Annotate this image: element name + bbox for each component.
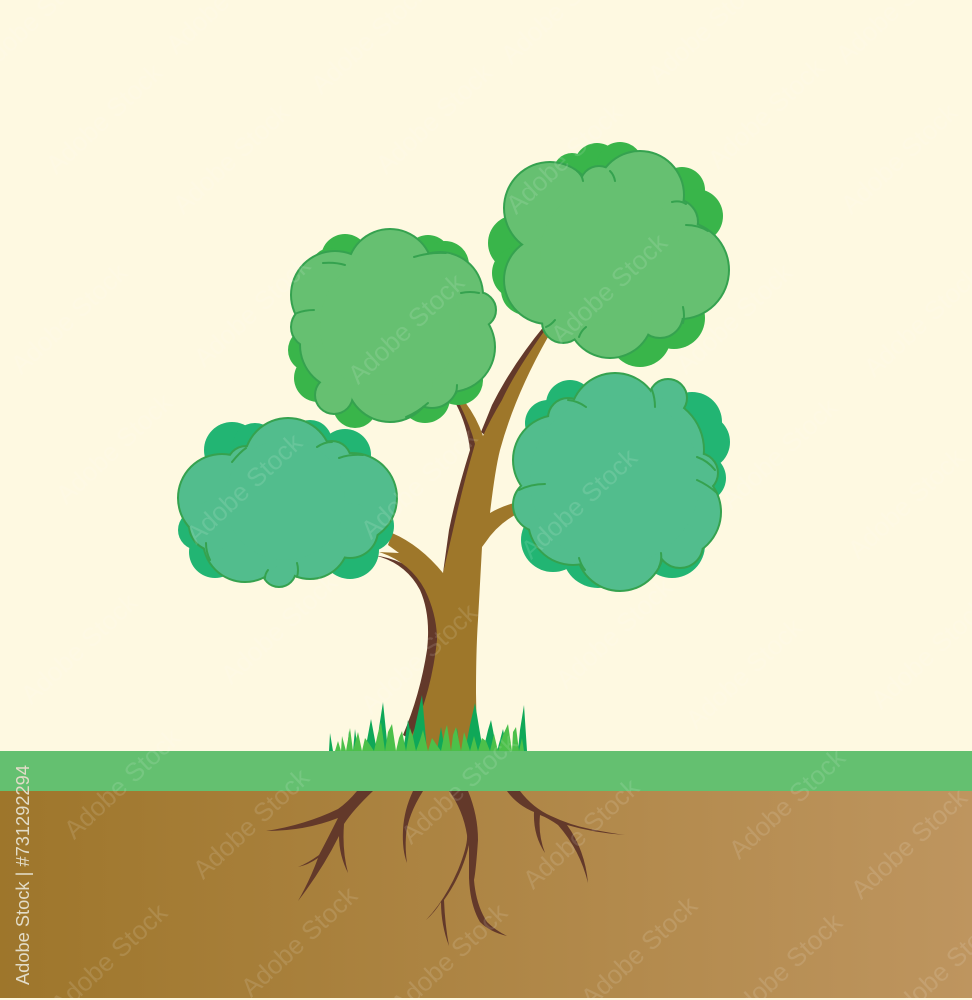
- foliage outline bottom left: [179, 419, 396, 586]
- stock watermarks: Adobe Stock: [715, 391, 844, 515]
- foliage back bottom left: [178, 420, 394, 579]
- foliage creases bottom right: [519, 390, 717, 570]
- stock watermarks: Adobe Stock: [188, 249, 317, 373]
- stock watermarks: Adobe Stock: [215, 566, 344, 690]
- soil band: [0, 791, 972, 998]
- grass dark blades: [329, 695, 527, 751]
- stock watermarks: Adobe Stock: [702, 51, 831, 175]
- crown top right: [488, 142, 728, 367]
- stock watermarks: Adobe Stock: [167, 96, 296, 220]
- root centre: [426, 791, 507, 946]
- foliage front top left: [292, 230, 495, 421]
- crown bottom left: [178, 419, 396, 586]
- stock watermarks: Adobe Stock: [680, 611, 809, 735]
- stock watermarks: Adobe Stock: [5, 256, 134, 380]
- stock watermarks: Adobe Stock: [395, 726, 524, 850]
- grass band: [0, 751, 972, 791]
- root far left: [266, 791, 373, 901]
- stock watermarks: Adobe Stock: [58, 721, 187, 845]
- root centre left: [403, 791, 423, 863]
- stock id caption: Adobe Stock | #731292294: [13, 765, 33, 985]
- foliage front top right: [505, 152, 728, 357]
- stock watermarks: Adobe Stock: [723, 741, 852, 865]
- stock watermarks: Adobe Stock: [500, 96, 629, 220]
- crown bottom right: [514, 374, 730, 590]
- foliage front bottom right: [514, 374, 720, 590]
- stock watermarks: Adobe Stock: [835, 96, 964, 220]
- stock watermarks: Adobe Stock: [342, 266, 471, 390]
- trunk shadow side: [373, 325, 547, 745]
- root right: [507, 791, 625, 883]
- stock watermarks: Adobe Stock: [515, 441, 644, 565]
- foliage back top left: [288, 234, 483, 428]
- stock watermarks: Adobe Stock: [355, 421, 484, 545]
- stock watermarks: Adobe Stock: [15, 586, 144, 710]
- stock watermarks: Adobe Stock: [370, 56, 499, 180]
- grass light blades: [335, 722, 524, 751]
- crown top left: [288, 230, 495, 428]
- stock watermarks: Adobe Stock: [355, 596, 484, 720]
- foliage front bottom left: [179, 419, 396, 586]
- grass: [329, 695, 527, 751]
- foliage outline bottom right: [514, 374, 720, 590]
- roots: [266, 791, 625, 946]
- tree trunk and branches: [373, 325, 548, 751]
- foliage back top right: [488, 142, 723, 367]
- foliage creases top left: [297, 253, 479, 417]
- stock watermarks: Adobe Stock: [40, 56, 169, 180]
- foliage creases bottom left: [206, 442, 363, 578]
- stock watermarks: Adobe Stock: [187, 761, 316, 885]
- stock watermarks: Adobe Stock: [235, 879, 364, 1000]
- foliage outline top right: [505, 152, 728, 357]
- stock watermarks: Adobe Stock: [180, 426, 309, 550]
- trunk: [379, 330, 548, 751]
- foliage back bottom right: [521, 380, 730, 588]
- stock watermarks: Adobe Stock: [517, 771, 646, 895]
- stock watermarks: Adobe Stock: [50, 386, 179, 510]
- stock watermarks: Adobe Stock: [842, 441, 971, 565]
- stock watermarks: Adobe Stock: [545, 226, 674, 350]
- foliage outline top left: [292, 230, 495, 421]
- stock watermarks: Adobe Stock: [845, 781, 972, 905]
- stock watermarks: Adobe Stock: [670, 256, 799, 380]
- stock watermarks: Adobe Stock: [550, 571, 679, 695]
- foliage creases top right: [546, 171, 708, 337]
